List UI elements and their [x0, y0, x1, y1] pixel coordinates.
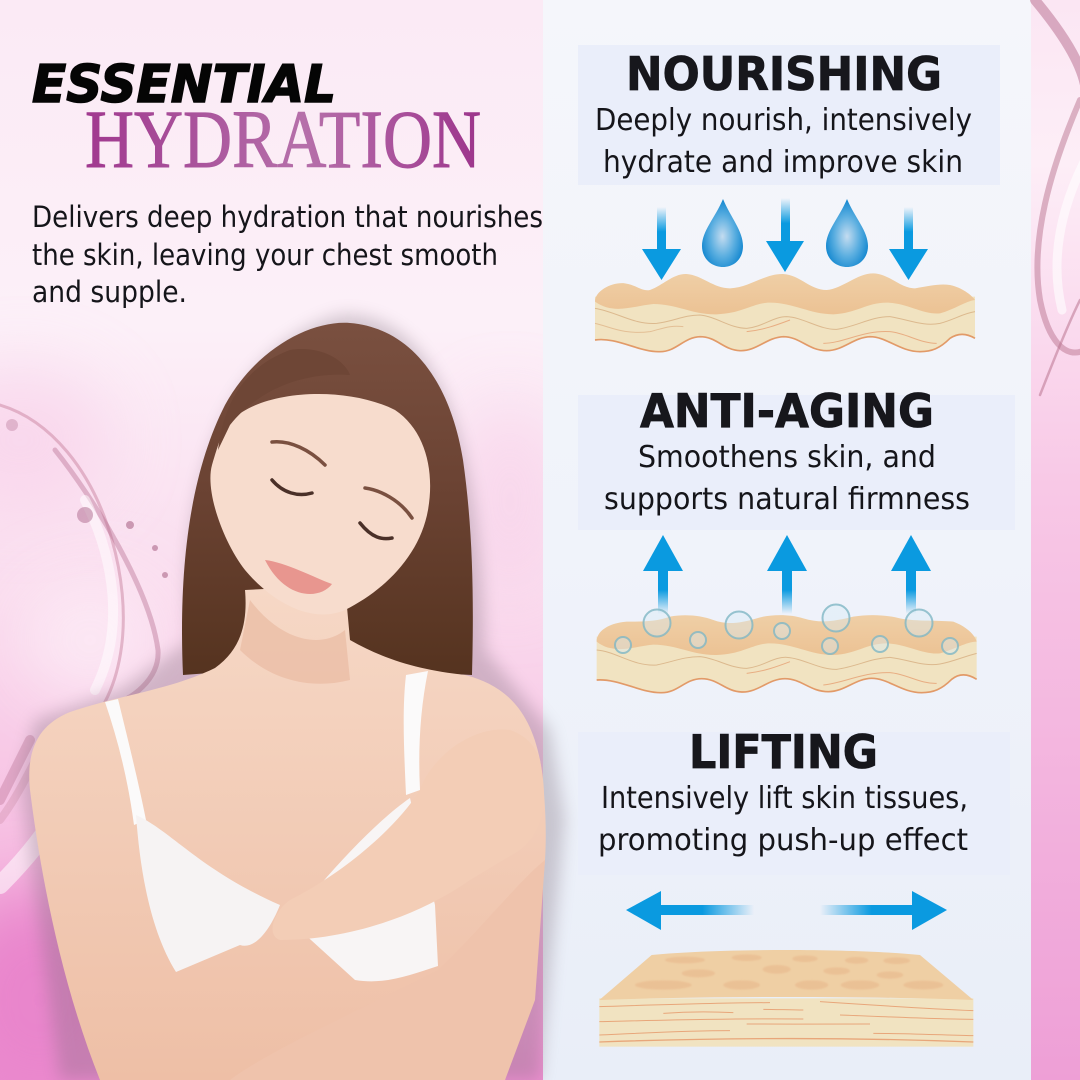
- skin upper layer: [595, 273, 975, 314]
- skin lower layer: [597, 637, 977, 693]
- illustration: rising bubbles: [597, 615, 977, 693]
- arrow: left: [626, 891, 754, 930]
- figure: stylized model: [20, 315, 565, 1080]
- arrow: down 2: [766, 198, 804, 272]
- lower arm: [230, 860, 545, 1080]
- arrow: down 1: [642, 207, 681, 280]
- water splash: right: [1035, 0, 1080, 395]
- eyes: [272, 442, 412, 539]
- white top: right: [300, 798, 438, 981]
- skin block side: [599, 998, 973, 1047]
- bubbles: [615, 604, 958, 654]
- hair: [182, 323, 473, 675]
- title: essential: ESSENTIAL: [32, 55, 336, 115]
- description: Intensively lift skin tissues,: [601, 781, 968, 816]
- skin upper layer: [597, 615, 977, 655]
- description: [598, 781, 968, 858]
- body: [29, 585, 546, 1080]
- panel: benefits: [543, 0, 1031, 1080]
- heading box: [578, 45, 1000, 185]
- section: nourishing: [578, 45, 1000, 352]
- skin block top: [599, 950, 973, 1000]
- heading: NOURISHING: [626, 47, 942, 101]
- skin lines: [595, 308, 975, 352]
- left strap: [105, 699, 146, 825]
- icon: water drop 2: [826, 199, 868, 267]
- water splash: left: [0, 405, 168, 885]
- illustration: water into skin: [595, 273, 975, 352]
- section: lifting: [578, 725, 1010, 1047]
- face: [210, 394, 430, 614]
- figure shadow: [20, 315, 565, 1080]
- description: Smoothens skin, and: [638, 440, 936, 475]
- white top: left: [136, 815, 280, 972]
- intro text: [32, 200, 543, 309]
- skin lines: [599, 1002, 973, 1042]
- arrow: up 1: [643, 535, 683, 614]
- skin lower layer: [595, 297, 975, 352]
- arrow: down 3: [889, 207, 928, 280]
- heading: ANTI-AGING: [640, 384, 934, 438]
- section: anti-aging: [578, 384, 1015, 693]
- skin lines: [597, 650, 977, 693]
- description: Deeply nourish, intensively: [595, 103, 972, 138]
- icon: water drop 1: [702, 199, 743, 267]
- description: supports natural firmness: [604, 482, 970, 517]
- description: [604, 440, 970, 517]
- description: [595, 103, 972, 180]
- arrow: up 2: [767, 535, 807, 614]
- arrow: up 3: [891, 535, 931, 614]
- intro text: the skin, leaving your chest smooth: [32, 238, 498, 272]
- intro text: and supple.: [32, 275, 187, 309]
- heading box: [578, 732, 1010, 875]
- right strap: [404, 671, 428, 795]
- pores: [635, 954, 943, 990]
- neck shade: [240, 600, 350, 684]
- title: hydration: HYDRATION: [85, 93, 481, 185]
- background: [0, 0, 560, 1080]
- description: promoting push-up effect: [598, 823, 968, 858]
- illustration: flat skin block: [599, 950, 973, 1047]
- intro text: Delivers deep hydration that nourishes: [32, 200, 543, 234]
- description: hydrate and improve skin: [603, 145, 963, 180]
- hair fringe: [218, 349, 350, 450]
- heading: LIFTING: [689, 725, 878, 779]
- title: [32, 55, 481, 185]
- crossed arm: [273, 730, 544, 940]
- arrow: right: [820, 891, 947, 930]
- heading box: [578, 395, 1015, 530]
- right edge strip: [1031, 0, 1080, 1080]
- lips: [265, 560, 332, 594]
